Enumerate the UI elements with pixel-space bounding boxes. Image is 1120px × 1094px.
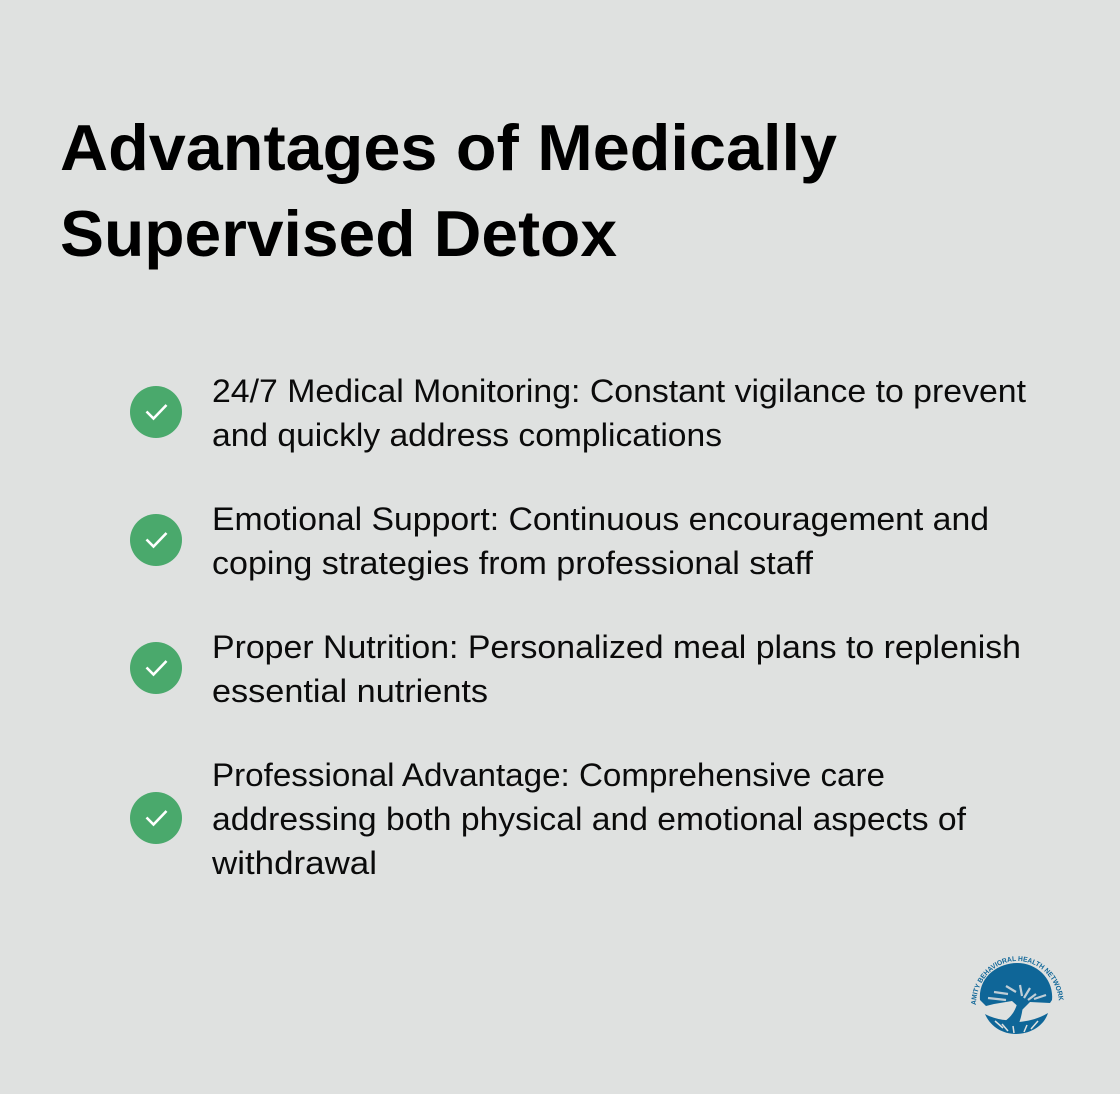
text: professional advantage: withdrawal — [211, 845, 377, 881]
text: emotional support: coping strategies from professional staff — [212, 545, 814, 581]
icon: green check — [130, 792, 182, 844]
icon: green check — [130, 514, 182, 566]
text: proper nutrition — [212, 629, 1021, 709]
title — [60, 111, 837, 270]
text: monitoring: and quickly address complications — [212, 417, 722, 453]
logo ring text: AMITY BEHAVIORAL HEALTH NETWORK — [971, 956, 1064, 1005]
tree canopy — [980, 963, 1052, 1010]
icon: green check — [130, 386, 182, 438]
text: emotional support — [212, 501, 989, 581]
title: Supervised Detox — [60, 197, 617, 270]
tree branches — [988, 985, 1046, 1000]
root gaps — [995, 1021, 1038, 1033]
item: 24/7 medical monitoring — [130, 373, 1026, 453]
text: emotional support: Emotional Support: Continuous encouragement and — [212, 501, 989, 537]
text: proper nutrition: Proper Nutrition: Personalized meal plans to replenish — [212, 629, 1021, 665]
roots bowl — [985, 1013, 1048, 1034]
text: monitoring: 24/7 Medical Monitoring: Constant vigilance to prevent — [212, 373, 1026, 409]
text: monitoring — [212, 373, 1026, 453]
title: Advantages of Medically — [60, 111, 837, 184]
item: proper nutrition — [130, 629, 1021, 709]
logo: Amity Behavioral Health Network — [971, 956, 1064, 1034]
text: proper nutrition: essential nutrients — [212, 673, 488, 709]
text: professional advantage — [211, 757, 967, 881]
icon: green check — [130, 642, 182, 694]
checklist — [130, 373, 1026, 881]
item: professional advantage — [130, 757, 967, 881]
text: professional advantage: Professional Advantage: Comprehensive care — [212, 757, 885, 793]
text: professional advantage: addressing both physical and emotional aspects of — [212, 801, 967, 837]
item: emotional support — [130, 501, 989, 581]
tree trunk — [1005, 1000, 1023, 1023]
